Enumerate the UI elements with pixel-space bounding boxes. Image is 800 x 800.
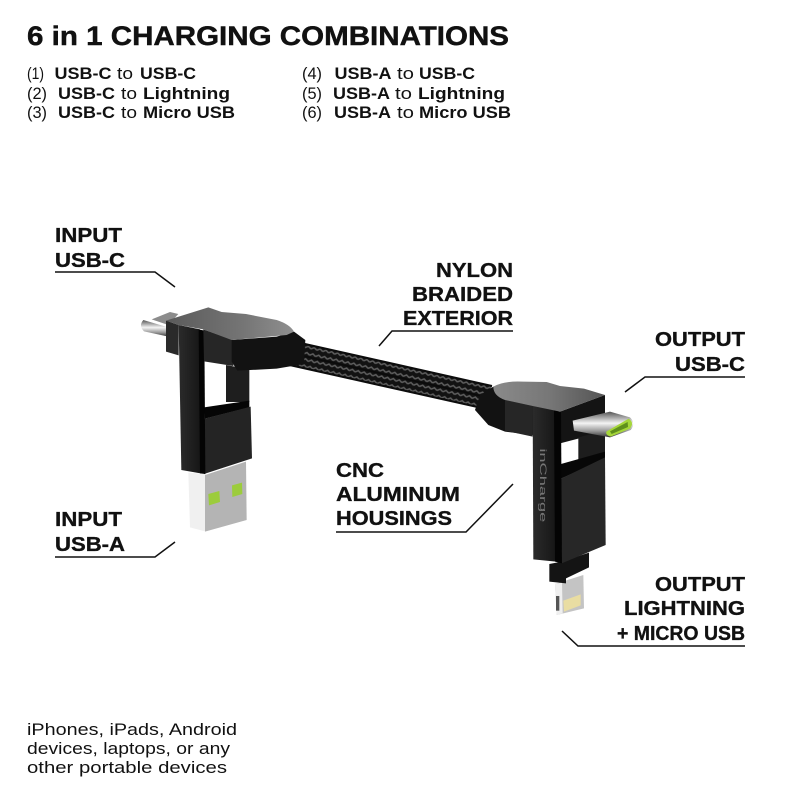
brand text: inCharge xyxy=(538,448,548,522)
combinations list: USB-A: USB-A xyxy=(334,65,392,83)
combinations list: USB-A: Micro USB xyxy=(419,104,511,122)
label: output USB-C xyxy=(625,328,746,392)
combinations list: USB-C xyxy=(27,65,235,122)
label: input USB-C: INPUT xyxy=(55,224,123,247)
right connector: USB-C and Lightning xyxy=(475,382,633,615)
combinations list: USB-C: USB-C xyxy=(58,104,115,122)
USB-A swivel housing xyxy=(179,325,252,474)
label: output lightning and micro USB: + MICRO USB xyxy=(617,622,745,645)
combinations list: USB-C: USB-C xyxy=(140,65,196,83)
combinations list: USB-A: to xyxy=(397,104,414,122)
cable collar, right xyxy=(475,387,560,435)
label: output lightning and micro USB: OUTPUT xyxy=(655,573,746,596)
USB-C plug, right, green tip xyxy=(573,412,633,437)
combinations list: USB-A: USB-C xyxy=(419,65,475,83)
left connector: USB-C and USB-A xyxy=(141,307,305,532)
label: nylon braided exterior xyxy=(379,259,513,346)
label: input USB-A: INPUT xyxy=(55,508,123,531)
device compatibility note xyxy=(27,720,237,777)
USB-C plug, left xyxy=(141,312,178,337)
combinations list: USB-C: (3) xyxy=(27,104,47,122)
combinations list: USB-A: to xyxy=(397,65,414,83)
label: output lightning and micro USB xyxy=(562,573,746,646)
combinations list: USB-A: (6) xyxy=(302,104,322,122)
device compatibility note: iPhones, iPads, Android xyxy=(27,720,237,739)
combinations list: USB-C: (2) xyxy=(27,85,47,103)
combinations list: USB-A xyxy=(302,65,511,122)
device compatibility note: other portable devices xyxy=(27,758,227,777)
combinations list: USB-A: Lightning xyxy=(418,85,505,103)
combinations list: USB-C: to xyxy=(121,104,137,122)
combinations list: USB-A: (4) xyxy=(302,65,322,83)
label: output USB-C: USB-C xyxy=(675,353,745,376)
combinations list: USB-A: to xyxy=(395,85,412,103)
combinations list: USB-A: USB-A xyxy=(333,85,390,103)
title: 6 in 1 CHARGING COMBINATIONS xyxy=(27,21,509,51)
braided cable xyxy=(285,342,492,408)
label: CNC aluminum housings: ALUMINUM xyxy=(336,483,460,506)
label: nylon braided exterior: NYLON xyxy=(436,259,513,282)
combinations list: USB-C: (1) xyxy=(27,65,44,83)
combinations list: USB-C: USB-C xyxy=(54,65,112,83)
label: nylon braided exterior: BRAIDED xyxy=(412,283,513,306)
device compatibility note: devices, laptops, or any xyxy=(27,739,231,758)
top plate, right xyxy=(493,382,605,412)
swivel housing, right xyxy=(505,395,606,563)
combinations list: USB-C: Lightning xyxy=(143,85,230,103)
combinations list: USB-A: (5) xyxy=(302,85,322,103)
label: CNC aluminum housings: CNC xyxy=(336,459,384,482)
label: nylon braided exterior: EXTERIOR xyxy=(403,307,513,330)
label: input USB-C: USB-C xyxy=(55,249,125,272)
label: output USB-C: OUTPUT xyxy=(655,328,746,351)
combinations list: USB-C: to xyxy=(121,85,137,103)
combinations list: USB-A: USB-A xyxy=(334,104,391,122)
label: output lightning and micro USB: LIGHTNING xyxy=(624,597,745,620)
Lightning plug xyxy=(549,553,589,615)
label: CNC aluminum housings: HOUSINGS xyxy=(336,507,452,530)
combinations list: USB-C: Micro USB xyxy=(143,104,235,122)
combinations list: USB-C: USB-C xyxy=(58,85,115,103)
label: input USB-A xyxy=(55,508,175,557)
label: CNC aluminum housings xyxy=(336,459,513,532)
combinations list: USB-C: to xyxy=(117,65,133,83)
USB-A plug xyxy=(188,462,247,532)
label: input USB-C xyxy=(55,224,175,287)
label: input USB-A: USB-A xyxy=(55,533,125,556)
top plate and cable collar, left xyxy=(166,307,305,371)
